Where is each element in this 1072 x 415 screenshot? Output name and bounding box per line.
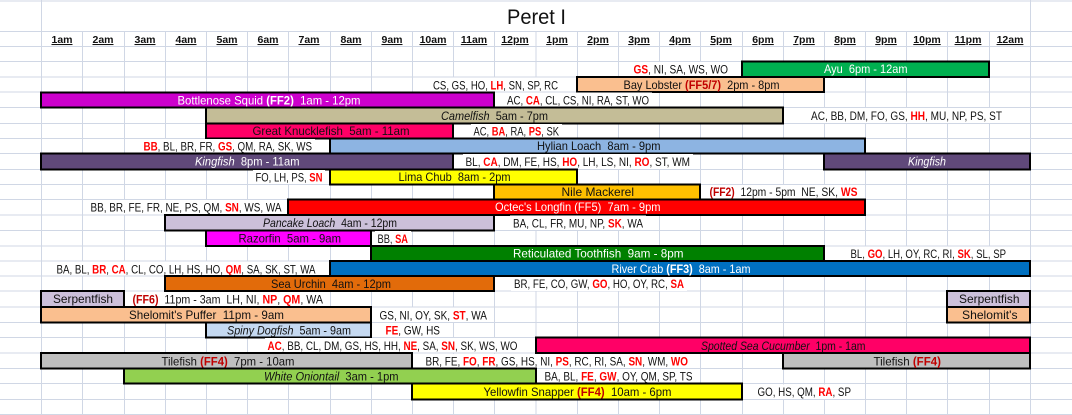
row: Bay Lobster [431, 77, 824, 92]
row: Great Knucklefish: AC, BA, RA, PS, SK [474, 124, 559, 138]
hour header row: 12am [997, 34, 1023, 46]
row: Octec's Longfin [88, 200, 865, 215]
row: Reticulated Toothfish: Reticulated Toothfish 9am - 8pm [513, 246, 684, 260]
row: Lima Chub: Lima Chub 8am - 2pm [398, 170, 510, 184]
row: Pancake Loach: BA, CL, FR, MU, NP, SK, WA [513, 216, 643, 230]
row: Kingfish: BL, CA, DM, FE, HS, HO, LH, LS, NI, RO, ST, WM [466, 155, 690, 169]
row: Reticulated Toothfish: BL, GO, LH, OY, RC, RI, SK, SL, SP [850, 247, 1006, 261]
row: Serpentfish: Serpentfish [959, 292, 1020, 306]
row: White Oniontail [124, 368, 695, 384]
row: Octec's Longfin: Octec's Longfin (FF5) 7am - 9pm [495, 200, 661, 214]
row: Spotted Sea Cucumber: Spotted Sea Cucumber 1pm - 1am [701, 339, 866, 353]
row: Nile Mackerel: (FF2) 12pm - 5pm NE, SK, WS [710, 185, 858, 199]
row: Pancake Loach: Pancake Loach 4am - 12pm [263, 216, 397, 230]
row: Nile Mackerel: Nile Mackerel [562, 185, 634, 199]
hour header row: 6pm [752, 34, 774, 46]
hour header row: 10pm [913, 34, 941, 46]
hour header row: 1am [51, 34, 73, 46]
row: Kingfish: Kingfish [908, 154, 946, 168]
row: Spotted Sea Cucumber [265, 338, 1030, 353]
hour header row: 5pm [710, 34, 732, 46]
hour header row: 8am [340, 34, 362, 46]
row: White Oniontail: White Oniontail 3am - 1pm [264, 370, 398, 384]
row: Spotted Sea Cucumber: AC, BB, CL, DM, GS, HS, HH, NE, SA, SN, SK, WS, WO [268, 339, 518, 353]
hour header row: 9pm [875, 34, 897, 46]
row: Shelomit's Puffer: Shelomit's Puffer 11pm - 9am [129, 308, 284, 322]
row: Bay Lobster: Bay Lobster (FF5/7) 2pm - 8pm [624, 78, 780, 92]
row: Yellowfin Snapper [412, 384, 854, 400]
hour header row: 9am [381, 34, 403, 46]
row: Hylian Loach [141, 138, 865, 154]
row: Tilefish: BR, FE, FO, FR, GS, HS, NI, PS, RC, RI, SA, SN, WM, WO [426, 354, 688, 368]
row: Tilefish: Tilefish (FF4) [874, 354, 941, 368]
row: Bottlenose Squid: AC, CA, CL, CS, NI, RA, ST, WO [507, 94, 649, 108]
hour header row: 8pm [834, 34, 856, 46]
row: Sea Urchin: Sea Urchin 4am - 12pm [271, 277, 391, 291]
row: Camelfish [206, 108, 1005, 124]
row: Great Knucklefish: Great Knucklefish 5am - 11am [252, 124, 410, 138]
hour header row: 6am [257, 34, 279, 46]
row: Shelomit's Puffer: GS, NI, OY, SK, ST, WA [380, 308, 487, 322]
row: Tilefish: Tilefish (FF4) 7pm - 10am [162, 354, 294, 368]
row: River Crab: River Crab (FF3) 8am - 1am [612, 262, 750, 276]
row: Bay Lobster: CS, GS, HO, LH, SN, SP, RC [433, 78, 558, 92]
row: Lima Chub [253, 170, 577, 184]
hour header row: 11pm [955, 34, 981, 46]
row: Tilefish [41, 353, 1030, 368]
hour header row: 2am [92, 34, 114, 46]
row: Reticulated Toothfish [371, 246, 1009, 261]
row: Bottlenose Squid [41, 92, 652, 108]
row: Serpentfish: (FF6) 11pm - 3am LH, NI, NP, QM, WA [132, 292, 323, 306]
row: Kingfish: Kingfish 8pm - 11am [195, 154, 300, 168]
hour header row: 7am [298, 34, 320, 46]
hour header row: 10am [420, 34, 446, 46]
row: River Crab: BA, BL, BR, CA, CL, CO, LH, HS, HO, QM, SA, SK, ST, WA [56, 262, 316, 276]
hour header row: 3am [134, 34, 156, 46]
hour header row: 5am [216, 34, 238, 46]
row: Ayu [631, 62, 989, 77]
row: Sea Urchin: BR, FE, CO, GW, GO, HO, OY, RC, SA [514, 277, 684, 291]
row: Razorfin: BB, SA [378, 232, 408, 246]
row: Camelfish: Camelfish 5am - 7pm [441, 109, 548, 123]
row: Hylian Loach: BB, BL, BR, FR, GS, QM, RA, SK, WS [144, 140, 312, 154]
row: Great Knucklefish [206, 124, 562, 138]
row: Camelfish: AC, BB, DM, FO, GS, HH, MU, NP, PS, ST [811, 109, 1003, 123]
hour header row: 1pm [546, 34, 568, 46]
hour header row: 4pm [669, 34, 691, 46]
hour header row: 2pm [587, 34, 609, 46]
row: Octec's Longfin: BB, BR, FE, FR, NE, PS, QM, SN, WS, WA [90, 200, 282, 214]
row: Ayu: Ayu 6pm - 12am [824, 62, 908, 76]
row: Spiny Dogfish: FE, GW, HS [386, 324, 440, 338]
row: Nile Mackerel [494, 184, 860, 200]
row: Lima Chub: FO, LH, PS, SN [256, 170, 322, 184]
row: Pancake Loach [165, 215, 646, 230]
row: Razorfin [206, 230, 411, 246]
row: Sea Urchin [165, 276, 687, 291]
row: Bottlenose Squid: Bottlenose Squid (FF2) 1am - 12pm [178, 94, 360, 108]
row: River Crab [54, 261, 1030, 276]
row: Hylian Loach: Hylian Loach 8am - 9pm [537, 139, 660, 153]
row: Kingfish [41, 154, 1030, 170]
row: White Oniontail: BA, BL, FE, GW, OY, QM, SP, TS [544, 370, 692, 384]
hour header row: 3pm [628, 34, 650, 46]
row: Razorfin: Razorfin 5am - 9am [238, 232, 341, 246]
title: Peret I [507, 6, 566, 29]
row: Serpentfish [41, 291, 1030, 307]
row: Yellowfin Snapper: Yellowfin Snapper (FF4) 10am - 6pm [484, 385, 672, 399]
row: Spiny Dogfish: Spiny Dogfish 5am - 9am [227, 324, 351, 338]
hour header row: 7pm [793, 34, 815, 46]
row: Yellowfin Snapper: GO, HS, QM, RA, SP [758, 385, 851, 399]
row: Shelomit's Puffer: Shelomit's [962, 308, 1018, 322]
hour header row [51, 34, 1023, 46]
hour header row: 11am [461, 34, 487, 46]
row: Serpentfish: Serpentfish [53, 292, 113, 306]
hour header row: 4am [175, 34, 197, 46]
row: Shelomit's Puffer [41, 307, 1030, 322]
hour header row: 12pm [501, 34, 529, 46]
row: Ayu: GS, NI, SA, WS, WO [634, 62, 728, 76]
row: Spiny Dogfish [206, 322, 443, 338]
